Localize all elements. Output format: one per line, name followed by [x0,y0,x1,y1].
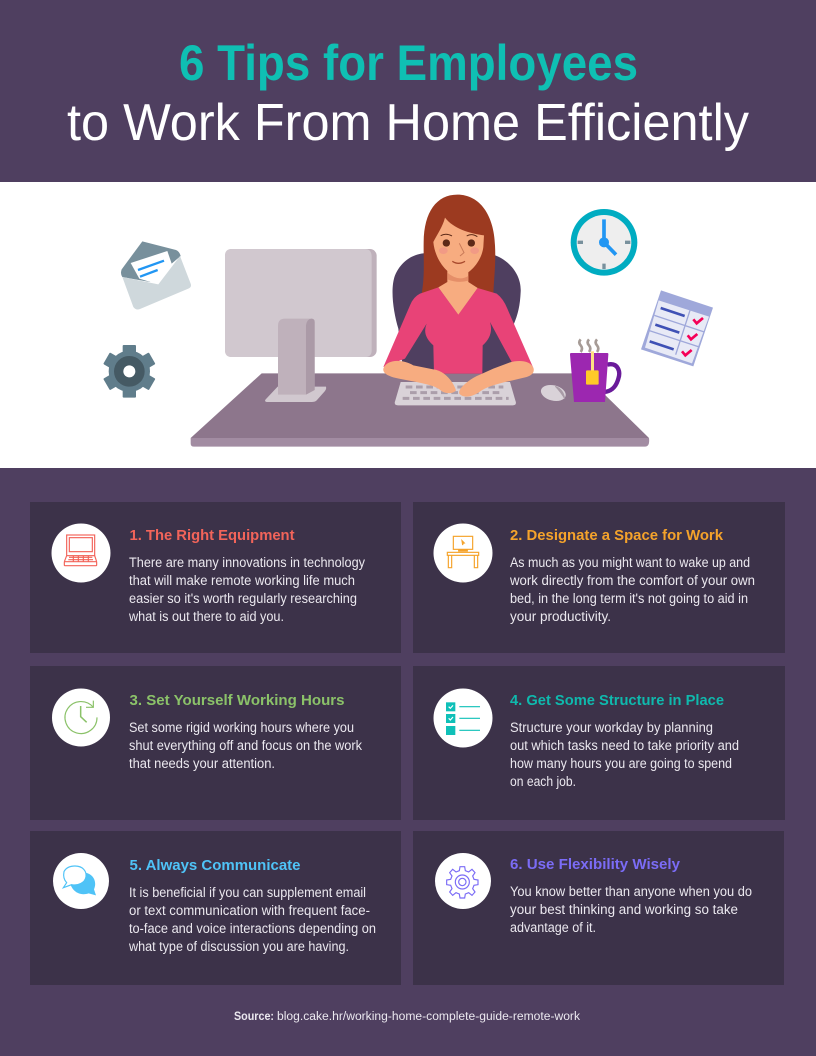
panel: tip 4 [413,666,785,820]
text: tip 6: your best thinking and working so take [510,902,738,917]
icon: desk with computer [434,524,492,582]
heading: tip 4: 4. Get Some Structure in Place [510,692,724,709]
title [67,35,749,152]
text: tip 2: bed, in the long term it's not going to aid in [510,591,748,606]
icon: envelope [121,241,191,310]
heading: tip 3: 3. Set Yourself Working Hours [130,692,344,709]
panel: tip 6 [413,831,784,985]
keyboard [395,382,516,405]
coffee mug with tea bag [570,339,619,402]
text: tip 2: work directly from the comfort of your own [509,573,755,588]
text: tip 6: You know better than anyone when you do [510,884,752,899]
computer mouse [539,382,567,404]
woman at desk [383,195,534,405]
text: tip 2: As much as you might want to wake up and [510,555,750,570]
panel: tip 3 [30,666,401,820]
text: tip 2: your productivity. [510,609,611,624]
text: tip 4: Structure your workday by planning [510,720,713,735]
text: tip 5: what type of discussion you are having. [128,939,349,954]
heading: tip 6: 6. Use Flexibility Wisely [510,856,681,873]
text: tip 1: what is out there to aid you. [128,609,284,624]
text: tip 1 [128,555,365,624]
text: tip 4: on each job. [510,774,576,789]
title: to Work From Home Efficiently [67,94,749,152]
panel: tip 2 [413,502,785,653]
icon: settings gear [103,345,155,398]
icon: checklist [434,688,492,748]
text: tip 4: out which tasks need to take priority and [510,738,739,753]
text: tip 4: how many hours you are going to spend [510,756,732,771]
heading: tip 5: 5. Always Communicate [130,857,300,874]
text: tip 3: Set some rigid working hours where you [129,720,354,735]
text: tip 6 [510,884,752,935]
title: 6 Tips for Employees [179,35,638,91]
icon: clock with arrow [52,688,110,746]
text: tip 1: There are many innovations in technology [129,555,365,570]
text: tip 2 [509,555,755,624]
monitor [225,249,377,402]
checklist [641,290,713,366]
text: tip 5 [128,885,376,954]
panel: tip 1 [30,502,401,653]
text: tip 4 [510,720,739,789]
text: tip 1: that will make remote working life much [129,573,355,588]
text: tip 5: It is beneficial if you can supplement email [129,885,366,900]
text: tip 5: or text communication with frequent face- [129,903,370,918]
icon: outline gear [435,853,491,909]
text: tip 3 [129,720,362,771]
wall clock [571,209,637,276]
icon: laptop [52,524,110,582]
hands and forearms [383,361,534,397]
heading: tip 2: 2. Designate a Space for Work [510,527,724,544]
text: tip 1: easier so it's worth regularly researching [129,591,357,606]
text: tip 5: to-face and voice interactions depending on [129,921,376,936]
desk [191,373,649,447]
source line: Source: [234,1011,274,1023]
text: tip 3: shut everything off and focus on the work [129,738,362,753]
text: tip 6: advantage of it. [510,920,596,935]
source line: blog.cake.hr/working-home-complete-guide-remote-work [277,1011,580,1023]
heading: tip 1: 1. The Right Equipment [130,527,294,544]
panel: tip 5 [30,831,401,985]
icon: speech bubbles [53,853,109,909]
illustration panel: woman working at a desk [0,182,816,468]
text: tip 3: that needs your attention. [129,756,275,771]
